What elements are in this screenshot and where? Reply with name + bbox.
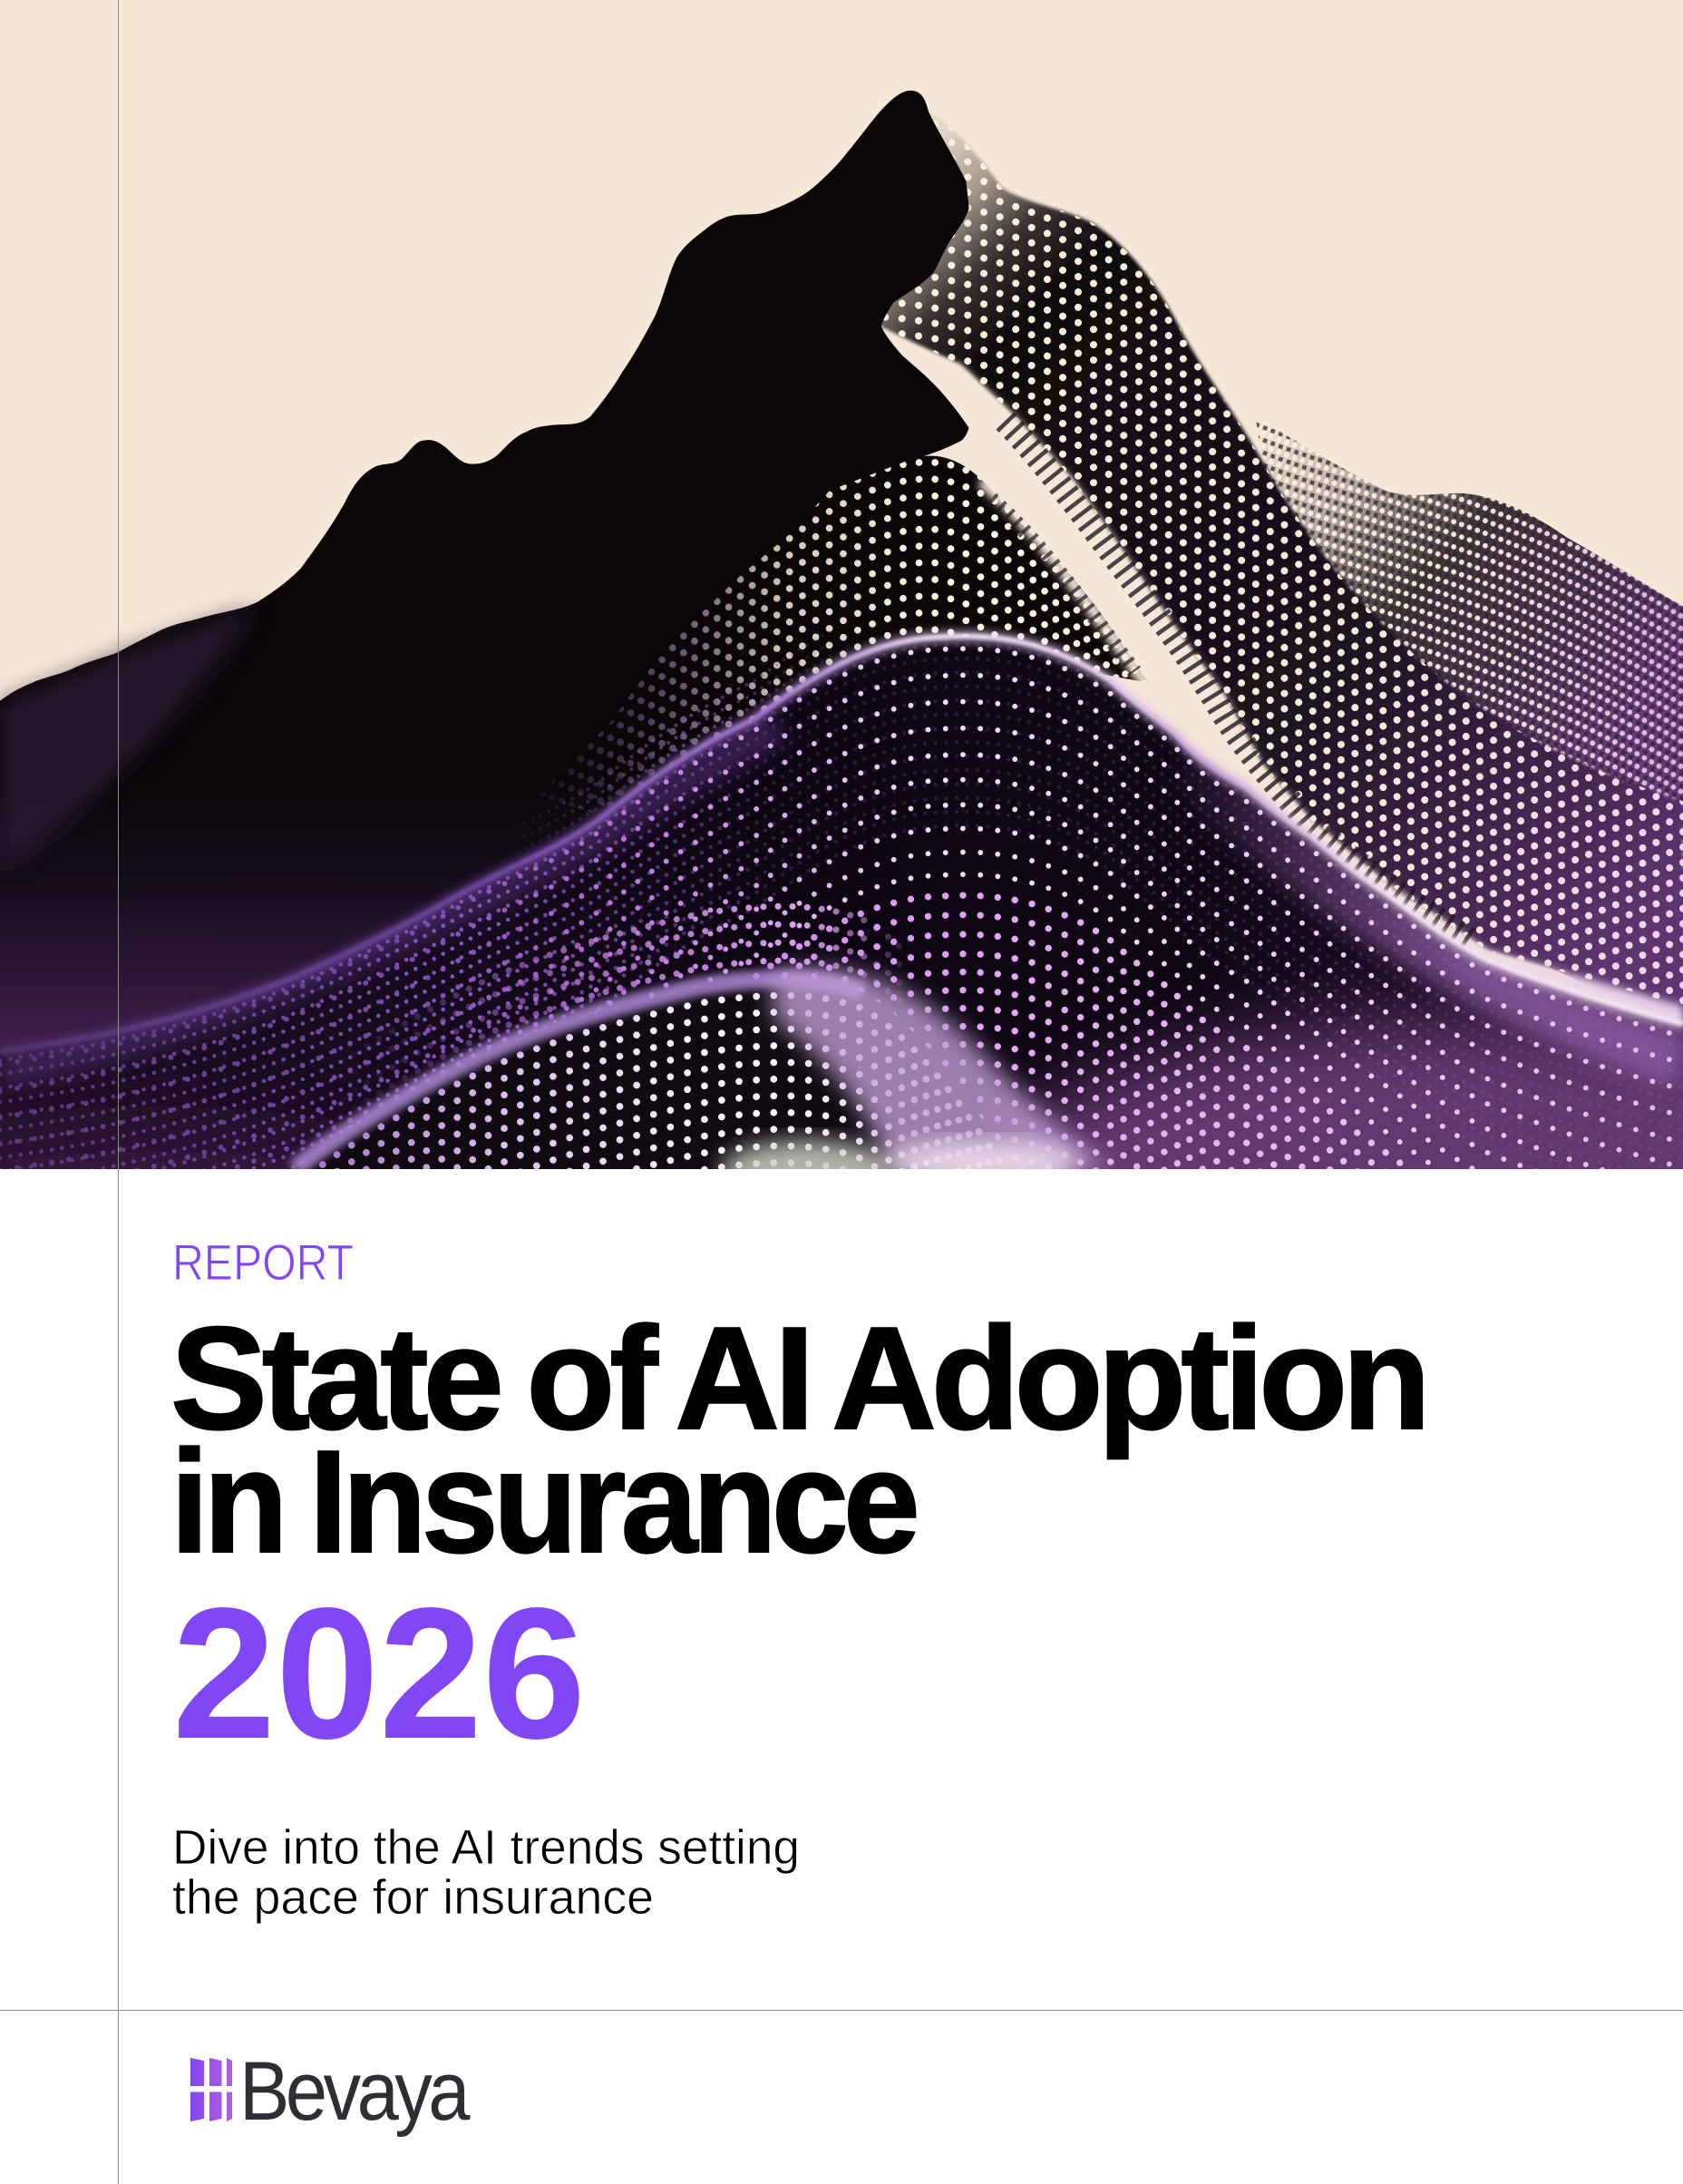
purple glow, lower left [0,1108,337,1169]
comb shadow teeth along the crease [1005,421,1470,941]
title line 1: State of AI Adoption [170,1297,1425,1460]
hero illustration: dotted mountain [0,0,1683,1169]
pink dots above the lower ridge [352,903,912,1112]
horizontal footer rule [0,2010,1683,2011]
lit crest line [0,636,1683,1052]
cover to clip blur below hero edge [0,1169,1683,1183]
title [170,1297,1425,1584]
white dot rows on right ridge [883,121,1683,1005]
lower wave with white dots [286,952,1113,1169]
black mountain silhouette [0,91,968,1169]
right crest underglow [1181,759,1683,1062]
faint purple dots above crest [0,599,1683,1039]
right dotted ridge [880,112,1683,1006]
purple sheen on left flank [0,606,258,871]
cream sky [0,0,1683,1169]
left crest purple band [0,727,780,1070]
wordmark: Bevaya [239,2045,471,2138]
front purple hump [0,624,1683,1169]
lilac ridge highlight [295,979,863,1169]
title line 2: in Insurance [170,1420,916,1584]
pale crease between ridges [890,343,1683,1031]
front dot rows [0,646,1672,1169]
logo: Bevaya [190,2045,471,2138]
year: 2026 [172,1569,586,1778]
comb teeth on hump edge [991,499,1134,672]
grey-white glow at bottom edge [721,1140,894,1201]
icon: logo mark [190,2058,232,2121]
lilac sheen descending right [773,969,1114,1169]
dense purple dots on the left [0,642,1683,1169]
pale sheen at the foot [884,1141,1079,1185]
soft crest halo [0,636,1683,1052]
middle dotted hump [539,455,1148,815]
subtitle line 1: Dive into the AI trends setting [172,1820,800,1875]
vertical margin rule [118,0,119,2184]
eyebrow label: REPORT: REPORT [172,1233,354,1291]
back ridge with dotted rows [1256,419,1683,1025]
soft right edge of hump [981,481,1155,697]
subtitle [172,1820,800,1925]
purple glow, lower right [1010,984,1683,1169]
subtitle line 2: the pace for insurance [172,1870,654,1925]
